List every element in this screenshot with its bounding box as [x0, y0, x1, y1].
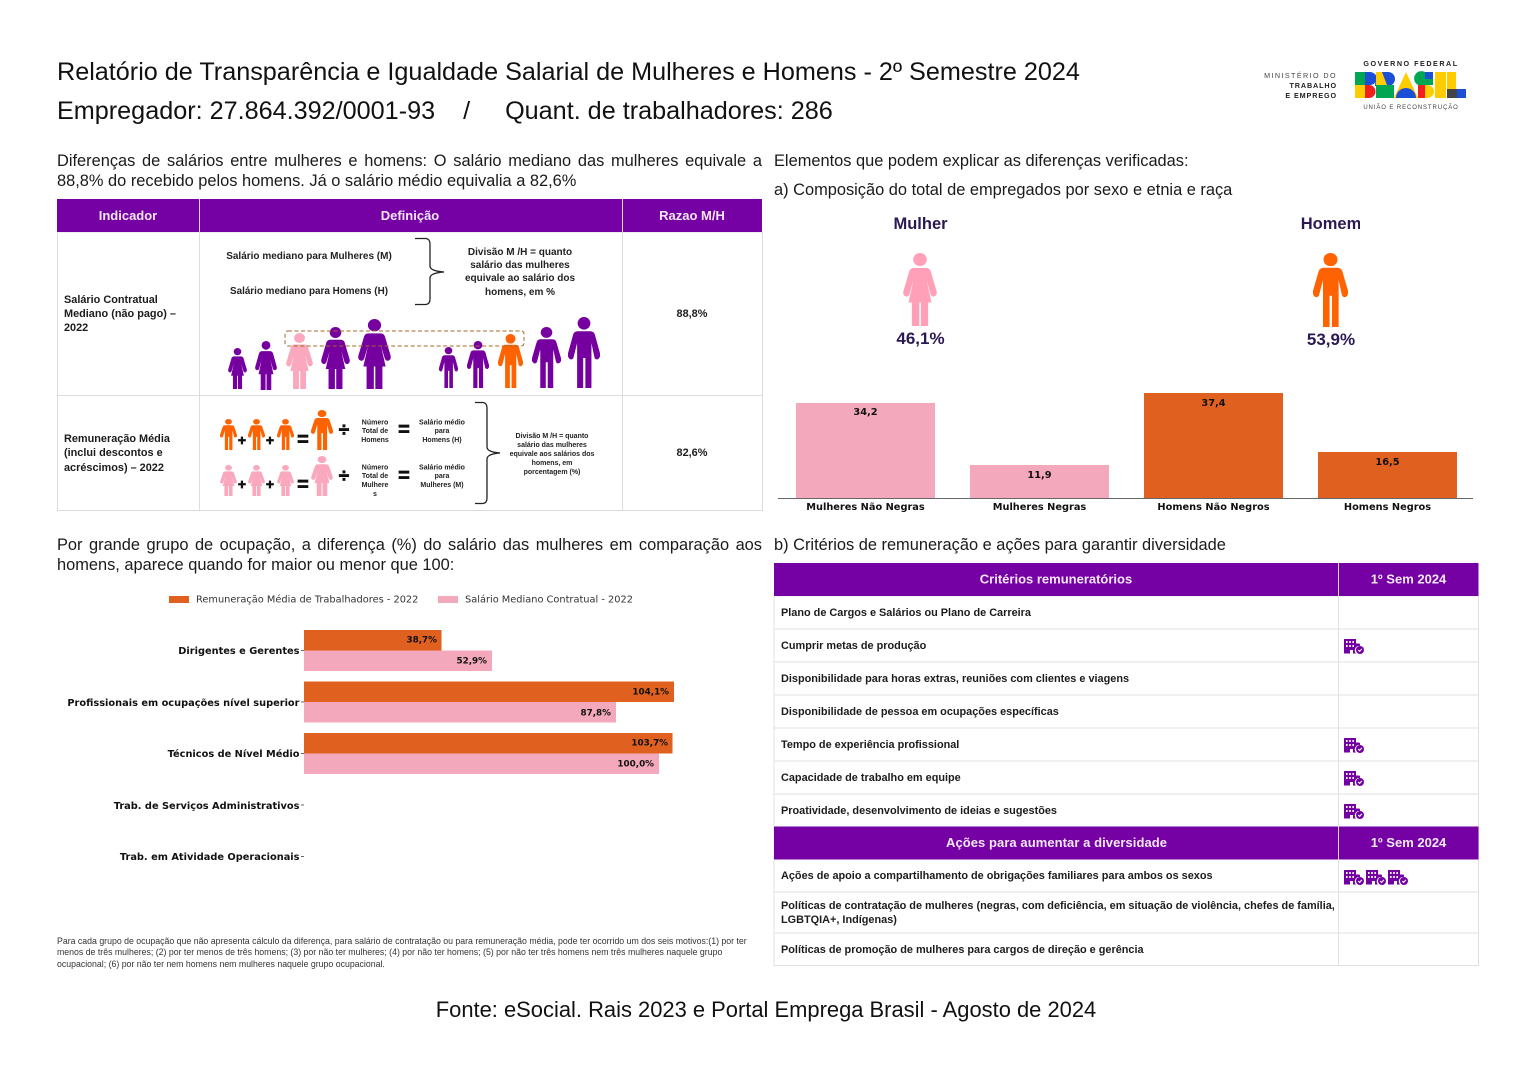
row label: salário contratual mediano: Mediano (não pago) –: [64, 308, 176, 320]
bar: Homens Negros: 16,5: [1375, 457, 1400, 468]
group: Técnicos de Nível Médio: [168, 733, 672, 774]
homem: [1301, 215, 1361, 349]
formula: homens: +: [238, 432, 246, 448]
text: divisão M/H mediano: Divisão M /H = quanto: [468, 247, 572, 258]
panel: tabela critérios remuneratórios e ações: [774, 563, 1479, 966]
group: Técnicos de Nível Médio: Técnicos de Nível Médio: [168, 748, 300, 760]
text: divisão M/H mediano: [465, 247, 575, 298]
homem: Homem: [1301, 215, 1360, 233]
mulher: 46,1%: [896, 329, 945, 348]
formula: mulheres: +: [238, 476, 246, 492]
bar: Homens Não Negros: [1144, 393, 1283, 513]
text: divisão M/H média: salário das mulheres: [517, 442, 587, 449]
logo: Ministério do Trabalho e Governo Federal: [1264, 59, 1466, 111]
ações rows: LGBTQIA+, Indígenas): [781, 914, 897, 926]
table header: [57, 199, 762, 232]
bar: Homens Não Negros: Homens Não Negros: [1157, 502, 1270, 513]
row label: salário contratual mediano: 2022: [64, 322, 88, 334]
critérios rows: Plano de Cargos e Salários ou Plano de Carreira: [781, 607, 1032, 619]
formula: homens: Número: [362, 420, 388, 426]
group: Técnicos de Nível Médio: 100,0%: [617, 760, 654, 770]
value: 88,8%: 88,8%: [677, 308, 708, 320]
heading: elementos que podem explicar: Elementos que podem explicar as diferenças verificadas:: [774, 152, 1189, 170]
formula: mulheres: Número: [362, 464, 388, 472]
formula: homens: Salário médio: [419, 420, 465, 426]
formula: mulheres: Salário médio: [419, 464, 465, 472]
group: Técnicos de Nível Médio: 103,7%: [631, 738, 668, 748]
bar: Mulheres Não Negras: 34,2: [853, 407, 878, 418]
text: divisão M/H mediano: homens, em %: [485, 287, 555, 298]
bar: Mulheres Negras: Mulheres Negras: [993, 502, 1086, 513]
ações rows: Políticas de promoção de mulheres para cargos de direção e gerência: [781, 944, 1144, 956]
text: divisão M/H média: homens, em: [532, 460, 572, 467]
panel: tabela indicador definição razão: [57, 199, 763, 511]
formula: homens: =: [297, 429, 309, 451]
dashed highlight: medianos: [285, 331, 524, 346]
bar: Mulheres Não Negras: [796, 403, 935, 513]
formula: mulheres: Mulhere: [362, 482, 389, 489]
group: Dirigentes e Gerentes: [178, 630, 492, 671]
table header: Definição: [381, 208, 439, 223]
bracket: salário mediano: [415, 238, 444, 304]
legend: Remuneração Média de Trabalhadores - 2022: [196, 594, 418, 606]
heading: critérios de remuneração: b) Critérios de remuneração e ações para garantir diversidade: [774, 536, 1226, 554]
header: ações para aumentar a diversidade: 1º Sem 2024: [1371, 835, 1447, 850]
critérios rows: Capacidade de trabalho em equipe: [781, 772, 961, 784]
footnote: Para cada grupo de ocupação que não apresenta cálculo da diferença, para salário de contratação ou para remuneração média, pode ter ocorrido um dos seis motivos:(1) por ter menos de três mulheres; (2) por ter menos de três homens; (3) por não ter mulheres; (4) por não ter homens; (5) por não ter três homens nem três mulheres naquele grupo ocupacional; (6) por não ter nem homens nem mulheres naquele grupo ocupacional.: [57, 936, 747, 969]
formula: mulheres: [220, 456, 465, 498]
critérios rows: [781, 607, 1129, 817]
header: critérios remuneratórios: 1º Sem 2024: [1371, 572, 1447, 586]
table header: Razao M/H: [659, 208, 725, 223]
group: Dirigentes e Gerentes: Dirigentes e Gerentes: [178, 646, 300, 657]
formula: mulheres: =: [398, 465, 410, 487]
logo: Ministério do Trabalho e Governo Federal: GOVERNO FEDERAL: [1363, 59, 1459, 68]
group: Profissionais nível superior: [67, 682, 674, 722]
row label: remuneração média: acréscimos) – 2022: [64, 462, 164, 474]
bracket: remuneração média: [475, 402, 500, 504]
logo: Ministério do Trabalho e Governo Federal: E EMPREGO: [1285, 91, 1337, 100]
bar: Mulheres Negras: 11,9: [1027, 470, 1052, 481]
icons: mulheres em ordem de salário: [228, 319, 391, 390]
bar: Mulheres Não Negras: Mulheres Não Negras: [806, 502, 925, 513]
critérios rows: Proatividade, desenvolvimento de ideias e sugestões: [781, 805, 1057, 817]
formula: mulheres: =: [297, 474, 309, 496]
critérios rows: Disponibilidade para horas extras, reuniões com clientes e viagens: [781, 673, 1129, 685]
row label: remuneração média: (inclui descontos e: [64, 447, 163, 459]
formula: homens: Homens: [361, 437, 389, 444]
ações rows: Políticas de contratação de mulheres (negras, com deficiência, em situação de violência, chefes de família,: [781, 900, 1335, 912]
mulher: Mulher: [893, 215, 948, 233]
text block: por grande grupo de ocupação: Por grande grupo de ocupação, a diferença (%) do salário das mulheres em comparação aos homens, aparece quando for maior ou menor que 100:: [57, 536, 762, 574]
group: Dirigentes e Gerentes: 38,7%: [406, 636, 437, 646]
text: divisão M/H média: equivale aos salários dos: [510, 451, 595, 458]
formula: mulheres: Mulheres (M): [420, 482, 464, 489]
definition text: salário mediano: Salário mediano para Mulheres (M): [226, 251, 392, 262]
group: Profissionais nível superior: 104,1%: [632, 688, 669, 698]
text: divisão M/H média: porcentagem (%): [524, 469, 580, 476]
group: Trab. de Serviços Administrativos: Trab. de Serviços Administrativos: [114, 801, 300, 812]
title: Relatório de Transparência e Igualdade Salarial de Mulheres e Homens - 2º Semestre 2024 Empregador: 27.864.392/0001-93 / Quant. de trabalhadores: 286: [57, 58, 1080, 124]
mulher: [893, 215, 948, 348]
legend: Salário Mediano Contratual - 2022: [465, 594, 633, 606]
row label: salário contratual mediano: Salário Contratual: [64, 294, 158, 306]
row label: salário contratual mediano: [64, 294, 176, 334]
text: divisão M/H média: Divisão M /H = quanto: [516, 433, 588, 440]
logo: Ministério do Trabalho e Governo Federal: TRABALHO: [1289, 81, 1337, 90]
formula: homens: =: [398, 419, 410, 441]
text: divisão M/H mediano: equivale ao salário dos: [465, 273, 575, 284]
icons: critérios atendidos: [1344, 639, 1364, 819]
icons: homens em ordem de salário: [439, 317, 600, 388]
formula: mulheres: ÷: [339, 466, 349, 487]
logo: Ministério do Trabalho e Governo Federal: MINISTÉRIO DO: [1264, 71, 1337, 80]
formula: homens: Total de: [362, 428, 388, 435]
bar: Mulheres Negras: [970, 465, 1109, 513]
text block: diferenças de salários: Diferenças de salários entre mulheres e homens: O salário mediano das mulheres equivale a 88,8% do recebido pelos homens. Já o salário médio equivalia a 82,6%: [57, 152, 762, 190]
formula: homens: [220, 410, 465, 451]
group: Profissionais nível superior: 87,8%: [580, 708, 611, 718]
formula: mulheres: Total de: [362, 473, 388, 480]
source: Fonte: eSocial. Rais 2023 e Portal Emprega Brasil - Agosto de 2024: [436, 997, 1096, 1022]
definition text: salário mediano: [226, 251, 392, 297]
text: divisão M/H mediano: salário das mulheres: [470, 260, 570, 271]
icons: ações atendidas: [1344, 870, 1408, 885]
formula: mulheres: para: [435, 473, 449, 480]
row label: remuneração média: [64, 433, 171, 474]
critérios rows: Cumprir metas de produção: [781, 640, 927, 652]
formula: homens: ÷: [339, 420, 349, 441]
header: critérios remuneratórios: [774, 563, 1478, 596]
bar: Homens Não Negros: 37,4: [1201, 398, 1226, 409]
formula: homens: +: [266, 432, 274, 448]
formula: homens: para: [435, 428, 449, 435]
bar chart: composição por sexo e raça: [778, 393, 1473, 513]
header: ações para aumentar a diversidade: Ações para aumentar a diversidade: [946, 835, 1167, 850]
formula: mulheres: +: [266, 476, 274, 492]
value: 82,6%: 82,6%: [677, 447, 708, 459]
formula: mulheres: s: [373, 491, 377, 498]
group: Trab. em Atividade Operacionais: Trab. em Atividade Operacionais: [120, 852, 300, 863]
ações rows: [781, 870, 1335, 956]
bar: Homens Negros: Homens Negros: [1344, 502, 1431, 513]
bar chart: diferença por grupo de ocupação: [67, 594, 674, 863]
logo: Ministério do Trabalho e Governo Federal: UNIÃO E RECONSTRUÇÃO: [1363, 104, 1459, 111]
critérios rows: Tempo de experiência profissional: [781, 739, 959, 751]
homem: 53,9%: [1307, 330, 1355, 349]
legend: [169, 594, 633, 606]
critérios rows: Disponibilidade de pessoa em ocupações específicas: [781, 706, 1059, 718]
group: Profissionais nível superior: Profissionais em ocupações nível superior: [67, 697, 300, 709]
group: Dirigentes e Gerentes: 52,9%: [456, 656, 487, 666]
row label: remuneração média: Remuneração Média: [64, 433, 171, 445]
definition text: salário mediano: Salário mediano para Homens (H): [230, 286, 388, 297]
formula: homens: Homens (H): [422, 437, 462, 444]
heading: composição do total de empregados: a) Composição do total de empregados por sexo e etnia e raça: [774, 180, 1232, 198]
header: ações para aumentar a diversidade: [774, 826, 1478, 860]
ações rows: Ações de apoio a compartilhamento de obrigações familiares para ambos os sexos: [781, 870, 1213, 882]
table header: Indicador: [99, 208, 157, 223]
bar: Homens Negros: [1318, 452, 1457, 513]
header: critérios remuneratórios: Critérios remuneratórios: [980, 572, 1132, 586]
text: divisão M/H média: [510, 433, 595, 476]
panel: mulher e homem: [893, 215, 1360, 349]
